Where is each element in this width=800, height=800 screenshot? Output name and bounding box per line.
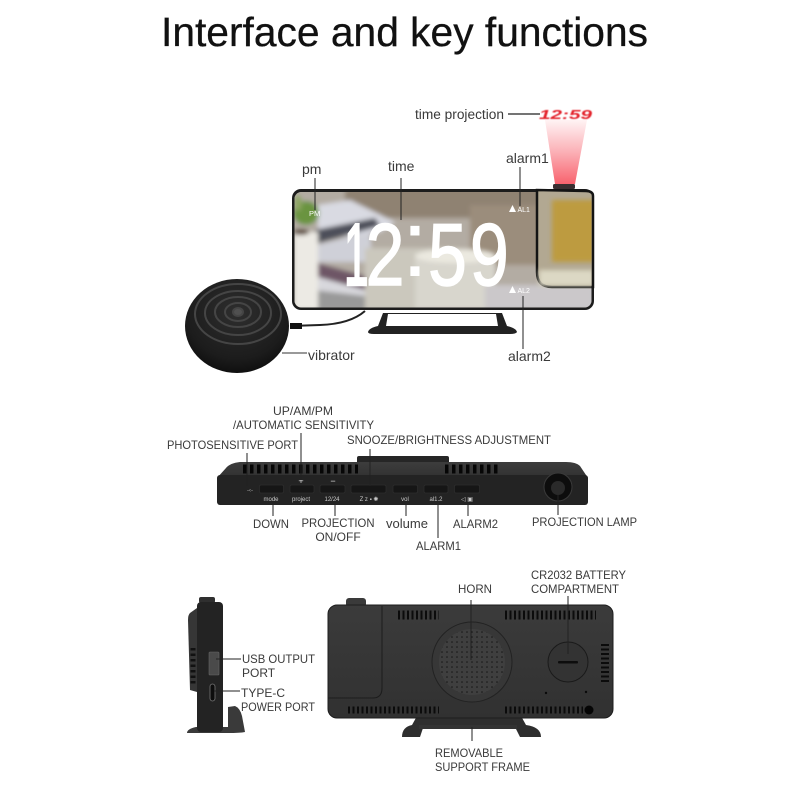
label: type-C power port	[214, 686, 316, 714]
label: removable support frame	[435, 727, 530, 774]
label: alarm1 button	[416, 505, 461, 553]
buttons	[260, 485, 480, 493]
clock back view	[328, 598, 613, 737]
label: type-C power port: POWER PORT	[241, 700, 316, 714]
label: projection on/off: PROJECTION	[302, 516, 374, 530]
label: photosensitive port	[167, 438, 299, 486]
button captions: +	[298, 476, 304, 486]
button captions: Z z ▪ ✺	[360, 496, 378, 503]
projected beam and time	[539, 107, 593, 184]
label: time projection: time projection	[415, 107, 504, 122]
vents	[348, 615, 605, 710]
bell icon AL1	[509, 205, 516, 212]
label: battery compartment	[531, 568, 626, 654]
LED time display: 1	[344, 205, 368, 304]
battery compartment	[548, 642, 588, 682]
label: removable support frame: SUPPORT FRAME	[435, 760, 530, 774]
label: projection on/off: ON/OFF	[315, 530, 361, 544]
label: pm: pm	[302, 161, 321, 177]
button captions: ◁ ▣	[461, 497, 473, 503]
button captions: project	[292, 497, 310, 503]
label: time	[388, 158, 415, 220]
label: volume	[386, 505, 428, 531]
button captions	[247, 476, 473, 503]
label: down	[253, 505, 289, 531]
label: down: DOWN	[253, 517, 289, 531]
side view stand	[187, 706, 245, 733]
mirror reflection: books, cups and plant	[290, 188, 595, 310]
button captions: 12/24	[324, 497, 340, 503]
label: USB output port	[216, 652, 316, 680]
label: UP/AM/PM automatic sensitivity: UP/AM/PM	[273, 404, 333, 418]
label: alarm1 button: ALARM1	[416, 539, 461, 553]
label: projection on/off	[302, 505, 374, 544]
label: time: time	[388, 158, 415, 174]
PM indicator: PM	[309, 209, 320, 218]
label: vibrator: vibrator	[308, 347, 355, 363]
label: alarm2 button	[453, 505, 498, 531]
AL1 indicator: AL1	[518, 207, 530, 214]
bell icon AL2	[509, 286, 516, 293]
LED time display: :	[402, 191, 428, 297]
label: UP/AM/PM automatic sensitivity	[233, 404, 374, 480]
label: battery compartment: CR2032 BATTERY	[531, 568, 626, 582]
USB port	[209, 652, 219, 675]
label: pm	[302, 161, 321, 210]
clock top view with buttons	[217, 456, 588, 505]
speaker grille	[432, 622, 512, 702]
label: type-C power port: TYPE-C	[241, 686, 285, 700]
label: UP/AM/PM automatic sensitivity: /AUTOMATIC SENSITIVITY	[233, 418, 374, 432]
label: USB output port: USB OUTPUT	[242, 652, 316, 666]
label: volume: volume	[386, 516, 428, 531]
button captions: -‹-	[247, 488, 253, 494]
label: snooze and brightness: SNOOZE/BRIGHTNESS ADJUSTMENT	[347, 433, 552, 447]
label: battery compartment: COMPARTMENT	[531, 582, 620, 596]
label: alarm1	[506, 150, 549, 206]
button captions: −	[330, 476, 336, 486]
label: projection lamp	[532, 495, 637, 529]
projector window	[537, 190, 597, 287]
label: USB output port: PORT	[242, 666, 276, 680]
label: alarm1: alarm1	[506, 150, 549, 166]
vibrator pad with cable	[185, 279, 365, 373]
clock front with mirror display	[290, 184, 597, 334]
label: alarm2	[508, 296, 551, 364]
button captions: al1.2	[429, 497, 443, 503]
label: alarm2: alarm2	[508, 348, 551, 364]
title: Interface and key functions	[161, 9, 648, 55]
projected beam and time: 12:59	[539, 107, 593, 122]
button captions: mode	[263, 497, 279, 503]
projection lamp knob	[544, 473, 572, 501]
LED time display: 259	[366, 205, 509, 304]
button captions: vol	[401, 497, 409, 503]
label: horn: HORN	[458, 582, 492, 596]
support frame	[402, 716, 541, 737]
projector knob on back	[346, 598, 366, 607]
stand	[368, 313, 517, 334]
clock side view	[187, 597, 245, 733]
label: photosensitive port: PHOTOSENSITIVE PORT	[167, 438, 299, 452]
label: vibrator	[282, 347, 355, 363]
type-C port	[210, 684, 215, 701]
label: projection lamp: PROJECTION LAMP	[532, 515, 637, 529]
label: removable support frame: REMOVABLE	[435, 746, 503, 760]
vent slots	[243, 464, 498, 474]
label: horn	[458, 582, 492, 660]
AL2 indicator: AL2	[518, 288, 530, 295]
label: alarm2 button: ALARM2	[453, 517, 498, 531]
projector lens on top	[553, 184, 575, 189]
